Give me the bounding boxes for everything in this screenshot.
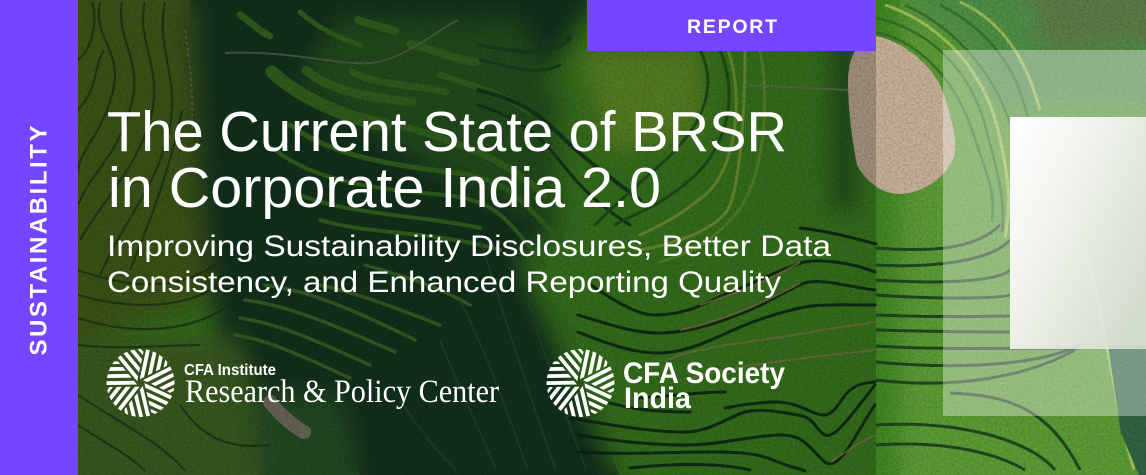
forest bottom right	[1108, 345, 1146, 475]
olive terrace lines far left	[78, 2, 270, 471]
logo text	[184, 362, 499, 410]
logo text: Research & Policy Center	[185, 374, 499, 410]
dark overlay on text area	[78, 0, 876, 475]
logo text: India	[624, 382, 692, 415]
sidebar label: SUSTAINABILITY	[26, 126, 52, 356]
stone path	[225, 20, 458, 63]
subtitle: Improving Sustainability Disclosures, Better Data	[107, 230, 831, 263]
logo: CFA Society India	[542, 343, 786, 421]
logo text: CFA Society	[623, 357, 786, 390]
subtitle: Consistency, and Enhanced Reporting Quality	[107, 266, 781, 299]
subtitle	[107, 230, 831, 299]
title: in Corporate India 2.0	[108, 156, 661, 220]
translucent white panel	[943, 50, 1146, 416]
icon: CFA star mark	[102, 343, 181, 421]
logo text	[623, 357, 786, 415]
terrace lines lower right of centre	[571, 261, 875, 471]
contour ridges upper right of centre	[478, 38, 876, 262]
report tag	[587, 0, 876, 51]
report tag: REPORT	[687, 16, 777, 38]
terrace bands upper centre	[240, 12, 560, 265]
road in lower field	[270, 402, 304, 432]
terrace lines right fields	[876, 225, 1080, 470]
logo text: CFA Institute	[184, 362, 276, 379]
title	[107, 100, 787, 220]
terrace bands lower centre	[235, 265, 470, 378]
white fog panel	[1010, 117, 1146, 349]
logo: CFA Institute Research & Policy Center	[102, 343, 499, 421]
title: The Current State of BRSR	[107, 100, 787, 164]
icon: CFA star mark	[542, 343, 621, 421]
purple sidebar	[0, 0, 78, 475]
pond	[848, 36, 955, 194]
